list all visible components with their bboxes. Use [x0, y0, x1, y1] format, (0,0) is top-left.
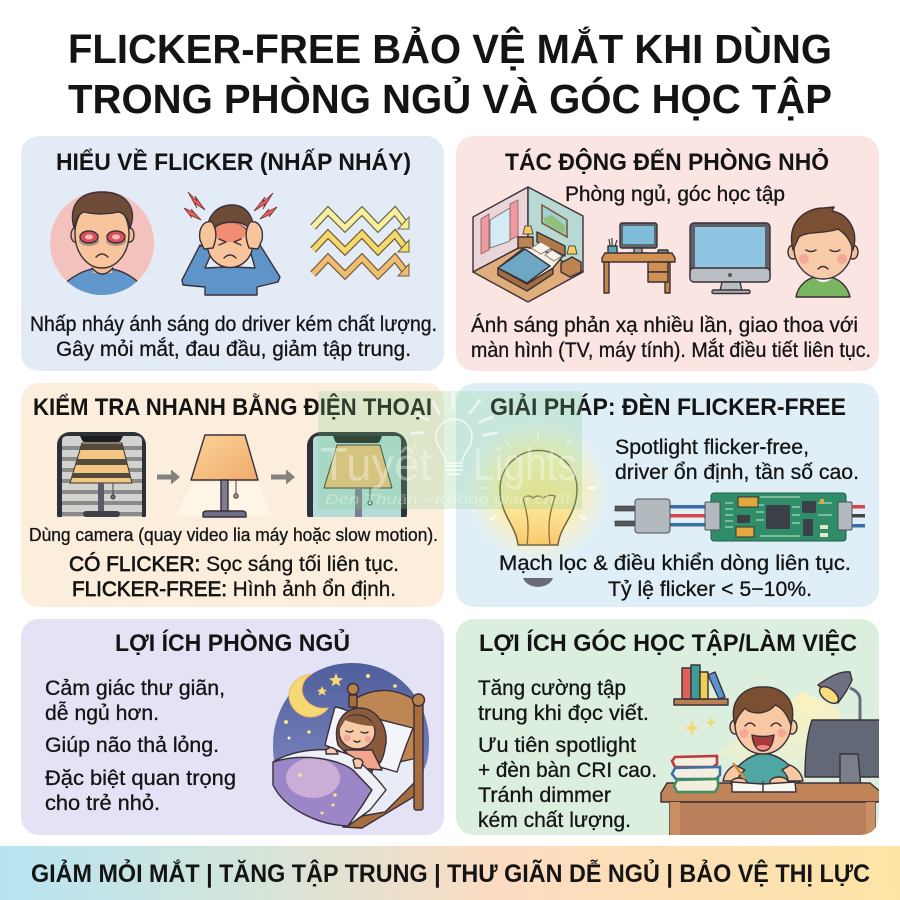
text: lợi ích học tập	[478, 677, 657, 832]
panel: tác động đến phòng nhỏ	[456, 136, 879, 371]
text: lợi ích: Cảm giác thư giãn,	[45, 677, 225, 700]
text: mạch lọc	[499, 552, 851, 601]
icon: flicker waves	[313, 211, 409, 276]
text: lợi ích: dễ ngủ hơn.	[45, 702, 159, 725]
icon: desk	[602, 223, 675, 293]
text: hướng dẫn kiểm tra	[29, 525, 438, 601]
text: mạch lọc: Mạch lọc & điều khiển dòng liên tục.	[499, 552, 851, 575]
icon: stable phone	[307, 432, 407, 517]
text: spotlight flicker-free	[615, 436, 859, 484]
icon: sad boy	[788, 207, 858, 297]
text: lợi ích học tập: Ưu tiên spotlight	[478, 734, 636, 757]
text: hướng dẫn kiểm tra: CÓ FLICKER: Sọc sáng tối liên tục.	[69, 553, 399, 576]
icon: driver circuit	[615, 493, 865, 541]
text: mô tả flicker	[30, 313, 437, 361]
icon: tv	[690, 223, 770, 294]
illustration: sleeping child	[273, 663, 429, 828]
panel: lợi ích góc học tập	[456, 619, 885, 838]
icon: headache man	[182, 192, 280, 295]
heading: tác động: TÁC ĐỘNG ĐẾN PHÒNG NHỎ	[505, 147, 829, 176]
text: spotlight flicker-free: Spotlight flicker-free,	[615, 436, 809, 459]
icon: bedroom	[473, 187, 583, 302]
title	[68, 26, 832, 122]
subheading: phòng ngủ: Phòng ngủ, góc học tập	[565, 183, 785, 206]
text: hướng dẫn kiểm tra: Dùng camera (quay video lia máy hoặc slow motion).	[29, 525, 438, 545]
watermark: Đèn Thuận - Không gian chất	[325, 491, 571, 507]
arrow	[157, 470, 180, 484]
text: spotlight flicker-free: driver ổn định, tần số cao.	[615, 461, 859, 484]
text: lợi ích học tập: + đèn bàn CRI cao.	[478, 759, 657, 782]
footer banner	[0, 846, 900, 900]
text: mạch lọc: Tỷ lệ flicker < 5−10%.	[608, 578, 812, 601]
text: lợi ích học tập: trung khi đọc viết.	[478, 702, 649, 725]
text: mô tả flicker: Gây mỏi mắt, đau đầu, giảm tập trung.	[56, 338, 411, 361]
watermark	[318, 391, 582, 509]
text: hướng dẫn kiểm tra: FLICKER-FREE: Hình ảnh ổn định.	[72, 578, 396, 601]
text: lợi ích học tập: Tăng cường tập	[478, 677, 626, 700]
text: ánh sáng phản xạ: màn hình (TV, máy tính). Mắt điều tiết liên tục.	[471, 339, 871, 362]
heading: lợi ích phòng ngủ: LỢI ÍCH PHÒNG NGỦ	[115, 628, 350, 657]
text: mô tả flicker: Nhấp nháy ánh sáng do driver kém chất lượng.	[30, 313, 437, 336]
heading: hiểu về flicker: HIỂU VỀ FLICKER (NHẤP NHÁY)	[56, 148, 411, 176]
title: FLICKER-FREE BẢO VỆ MẮT KHI DÙNG	[68, 26, 832, 72]
arrow	[271, 470, 295, 484]
icon: lamp	[176, 435, 272, 517]
text: lợi ích: Giúp não thả lỏng.	[45, 734, 219, 757]
icon: light bulb	[466, 420, 610, 587]
text: ánh sáng phản xạ: Ánh sáng phản xạ nhiều lần, giao thoa với	[471, 314, 858, 337]
panel: kiểm tra nhanh	[21, 383, 444, 607]
icon: tired eyes man	[50, 191, 154, 300]
text: lợi ích: Đặc biệt quan trọng	[45, 767, 236, 790]
heading: góc học tập: LỢI ÍCH GÓC HỌC TẬP/LÀM VIỆC	[479, 629, 857, 657]
watermark: Lights	[473, 438, 577, 490]
watermark: Tuyết	[320, 438, 432, 490]
title: TRONG PHÒNG NGỦ VÀ GÓC HỌC TẬP	[68, 76, 832, 122]
text: lợi ích	[45, 677, 236, 815]
text: lợi ích: cho trẻ nhỏ.	[45, 792, 160, 815]
panel: lợi ích phòng ngủ	[21, 619, 444, 835]
illustration: happy boy studying	[661, 665, 885, 838]
icon: phone with flicker	[57, 432, 146, 517]
panel: giải pháp	[456, 383, 879, 607]
heading: giải pháp: GIẢI PHÁP: ĐÈN FLICKER-FREE	[490, 392, 846, 421]
text: lợi ích học tập: kém chất lượng.	[478, 809, 631, 832]
panel: hiểu về flicker	[21, 136, 444, 371]
text: lợi ích học tập: Tránh dimmer	[478, 784, 611, 807]
heading: kiểm tra: KIỂM TRA NHANH BẰNG ĐIỆN THOẠI	[33, 393, 432, 421]
text: ánh sáng phản xạ	[471, 314, 871, 362]
